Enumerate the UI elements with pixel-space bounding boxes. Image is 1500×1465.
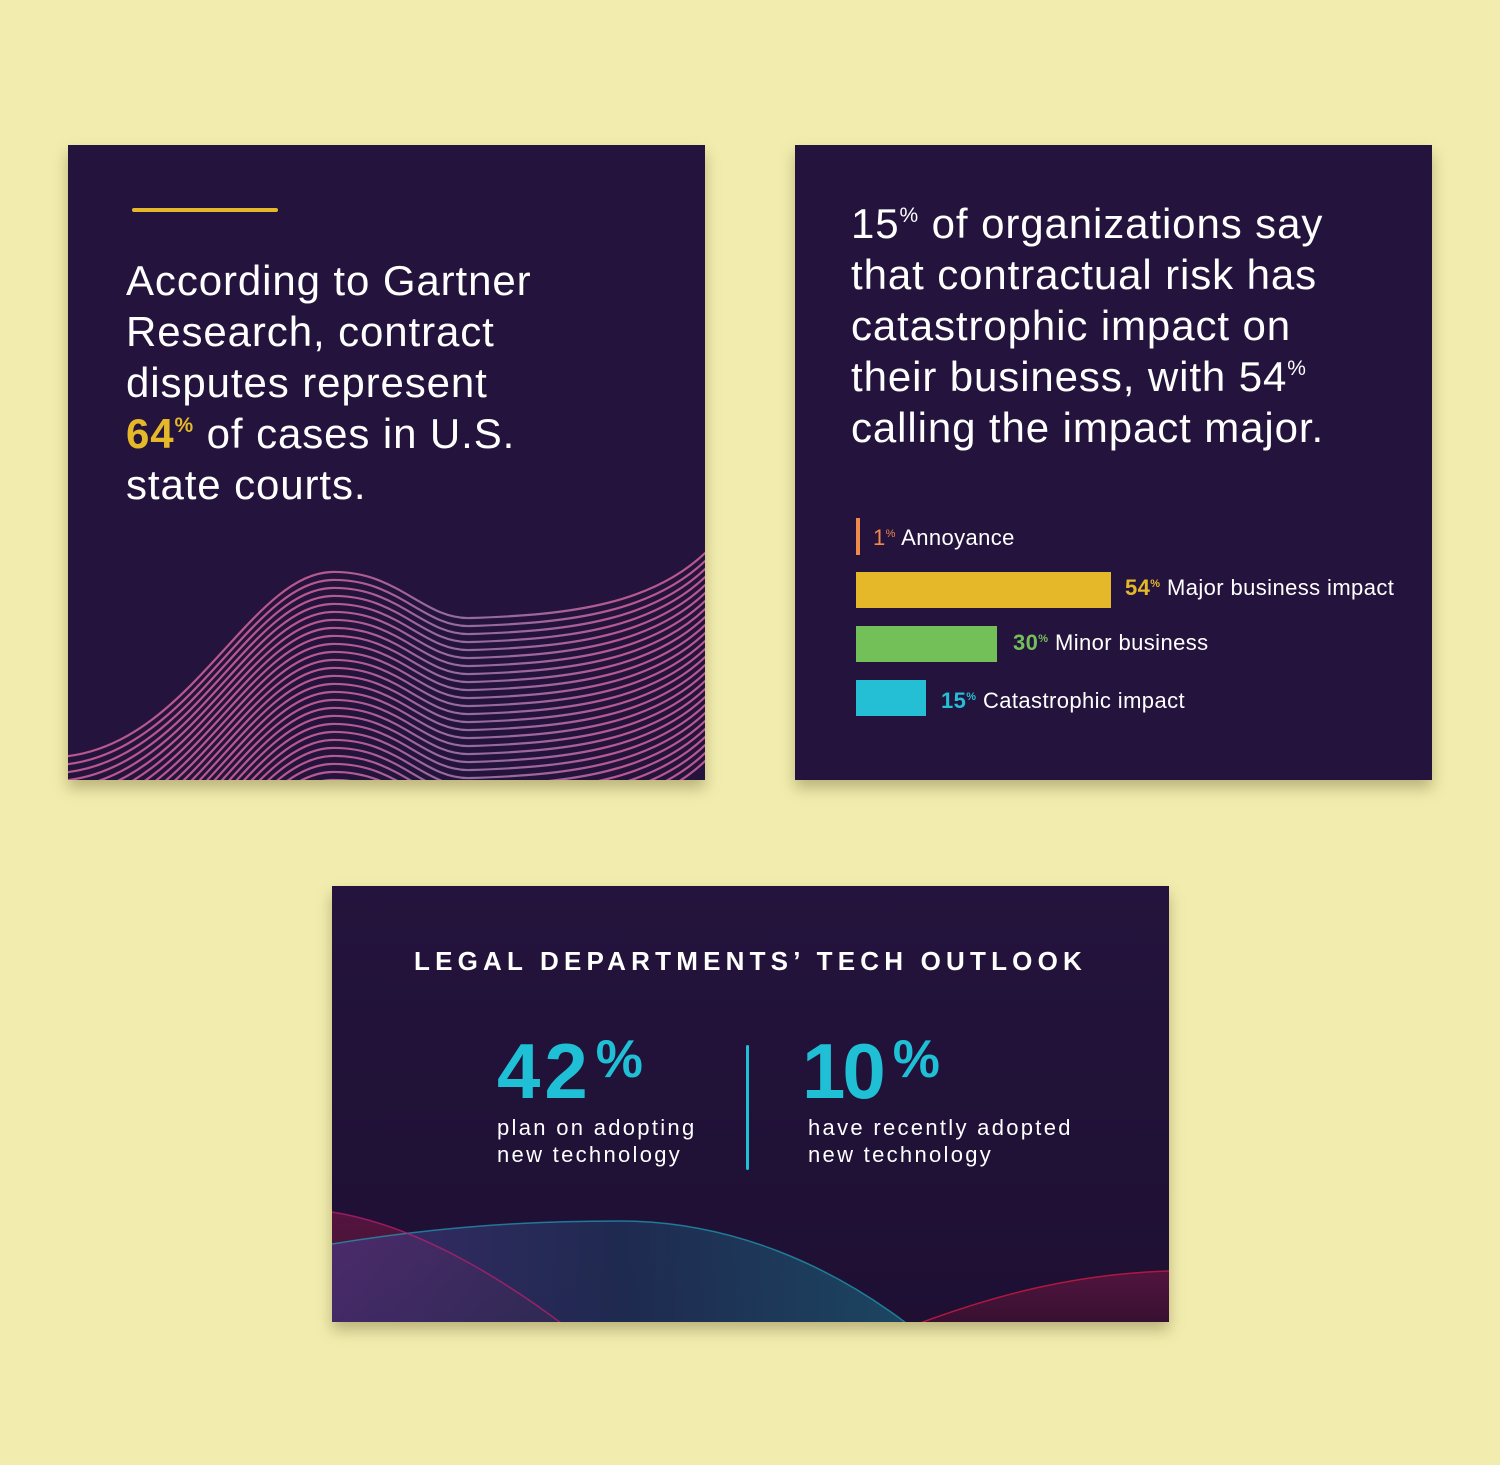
- stat: 42%: [497, 1027, 697, 1167]
- stat: 42%: new technology: [497, 1142, 682, 1167]
- stat: 10%: [802, 1027, 1073, 1167]
- bar chart: 30% Minor business: [1013, 630, 1209, 655]
- panel: contractual risk: [795, 145, 1432, 780]
- panel: gartner stat: [68, 145, 705, 780]
- wave graphic: [332, 1211, 1169, 1322]
- bar chart: [856, 518, 1394, 716]
- text block: gartner statement: disputes represent: [126, 359, 488, 406]
- text block: gartner statement: Research, contract: [126, 308, 495, 355]
- bar: major: [856, 572, 1111, 608]
- text block: gartner statement: 64% of cases in U.S.: [126, 410, 515, 457]
- bar chart: 1% Annoyance: [873, 525, 1015, 550]
- text block: gartner statement: According to Gartner: [126, 257, 532, 304]
- wave lines graphic: [68, 552, 705, 780]
- text block: risk statement: that contractual risk has: [851, 251, 1317, 298]
- bar chart: 15% Catastrophic impact: [941, 688, 1185, 713]
- bar: annoyance: [856, 518, 860, 555]
- stat: 42%: 42%: [497, 1027, 643, 1115]
- stat: 10%: new technology: [808, 1142, 993, 1167]
- text block: risk statement: calling the impact major.: [851, 404, 1324, 451]
- stat: 10%: 10%: [802, 1027, 940, 1115]
- text block: risk statement: [851, 200, 1324, 451]
- bar: catastrophic: [856, 680, 926, 716]
- bar: minor: [856, 626, 997, 662]
- bar chart: 54% Major business impact: [1125, 575, 1394, 600]
- text block: gartner statement: state courts.: [126, 461, 366, 508]
- divider: [746, 1045, 749, 1170]
- text block: risk statement: their business, with 54%: [851, 353, 1307, 400]
- text block: risk statement: catastrophic impact on: [851, 302, 1291, 349]
- accent line: [132, 208, 278, 212]
- stat: 42%: plan on adopting: [497, 1115, 697, 1140]
- text block: risk statement: 15% of organizations say: [851, 200, 1323, 247]
- stat: 10%: have recently adopted: [808, 1115, 1073, 1140]
- panel: tech outlook: [332, 886, 1169, 1322]
- text block: gartner statement: [126, 257, 532, 508]
- heading: LEGAL DEPARTMENTS’ TECH OUTLOOK: [414, 946, 1087, 976]
